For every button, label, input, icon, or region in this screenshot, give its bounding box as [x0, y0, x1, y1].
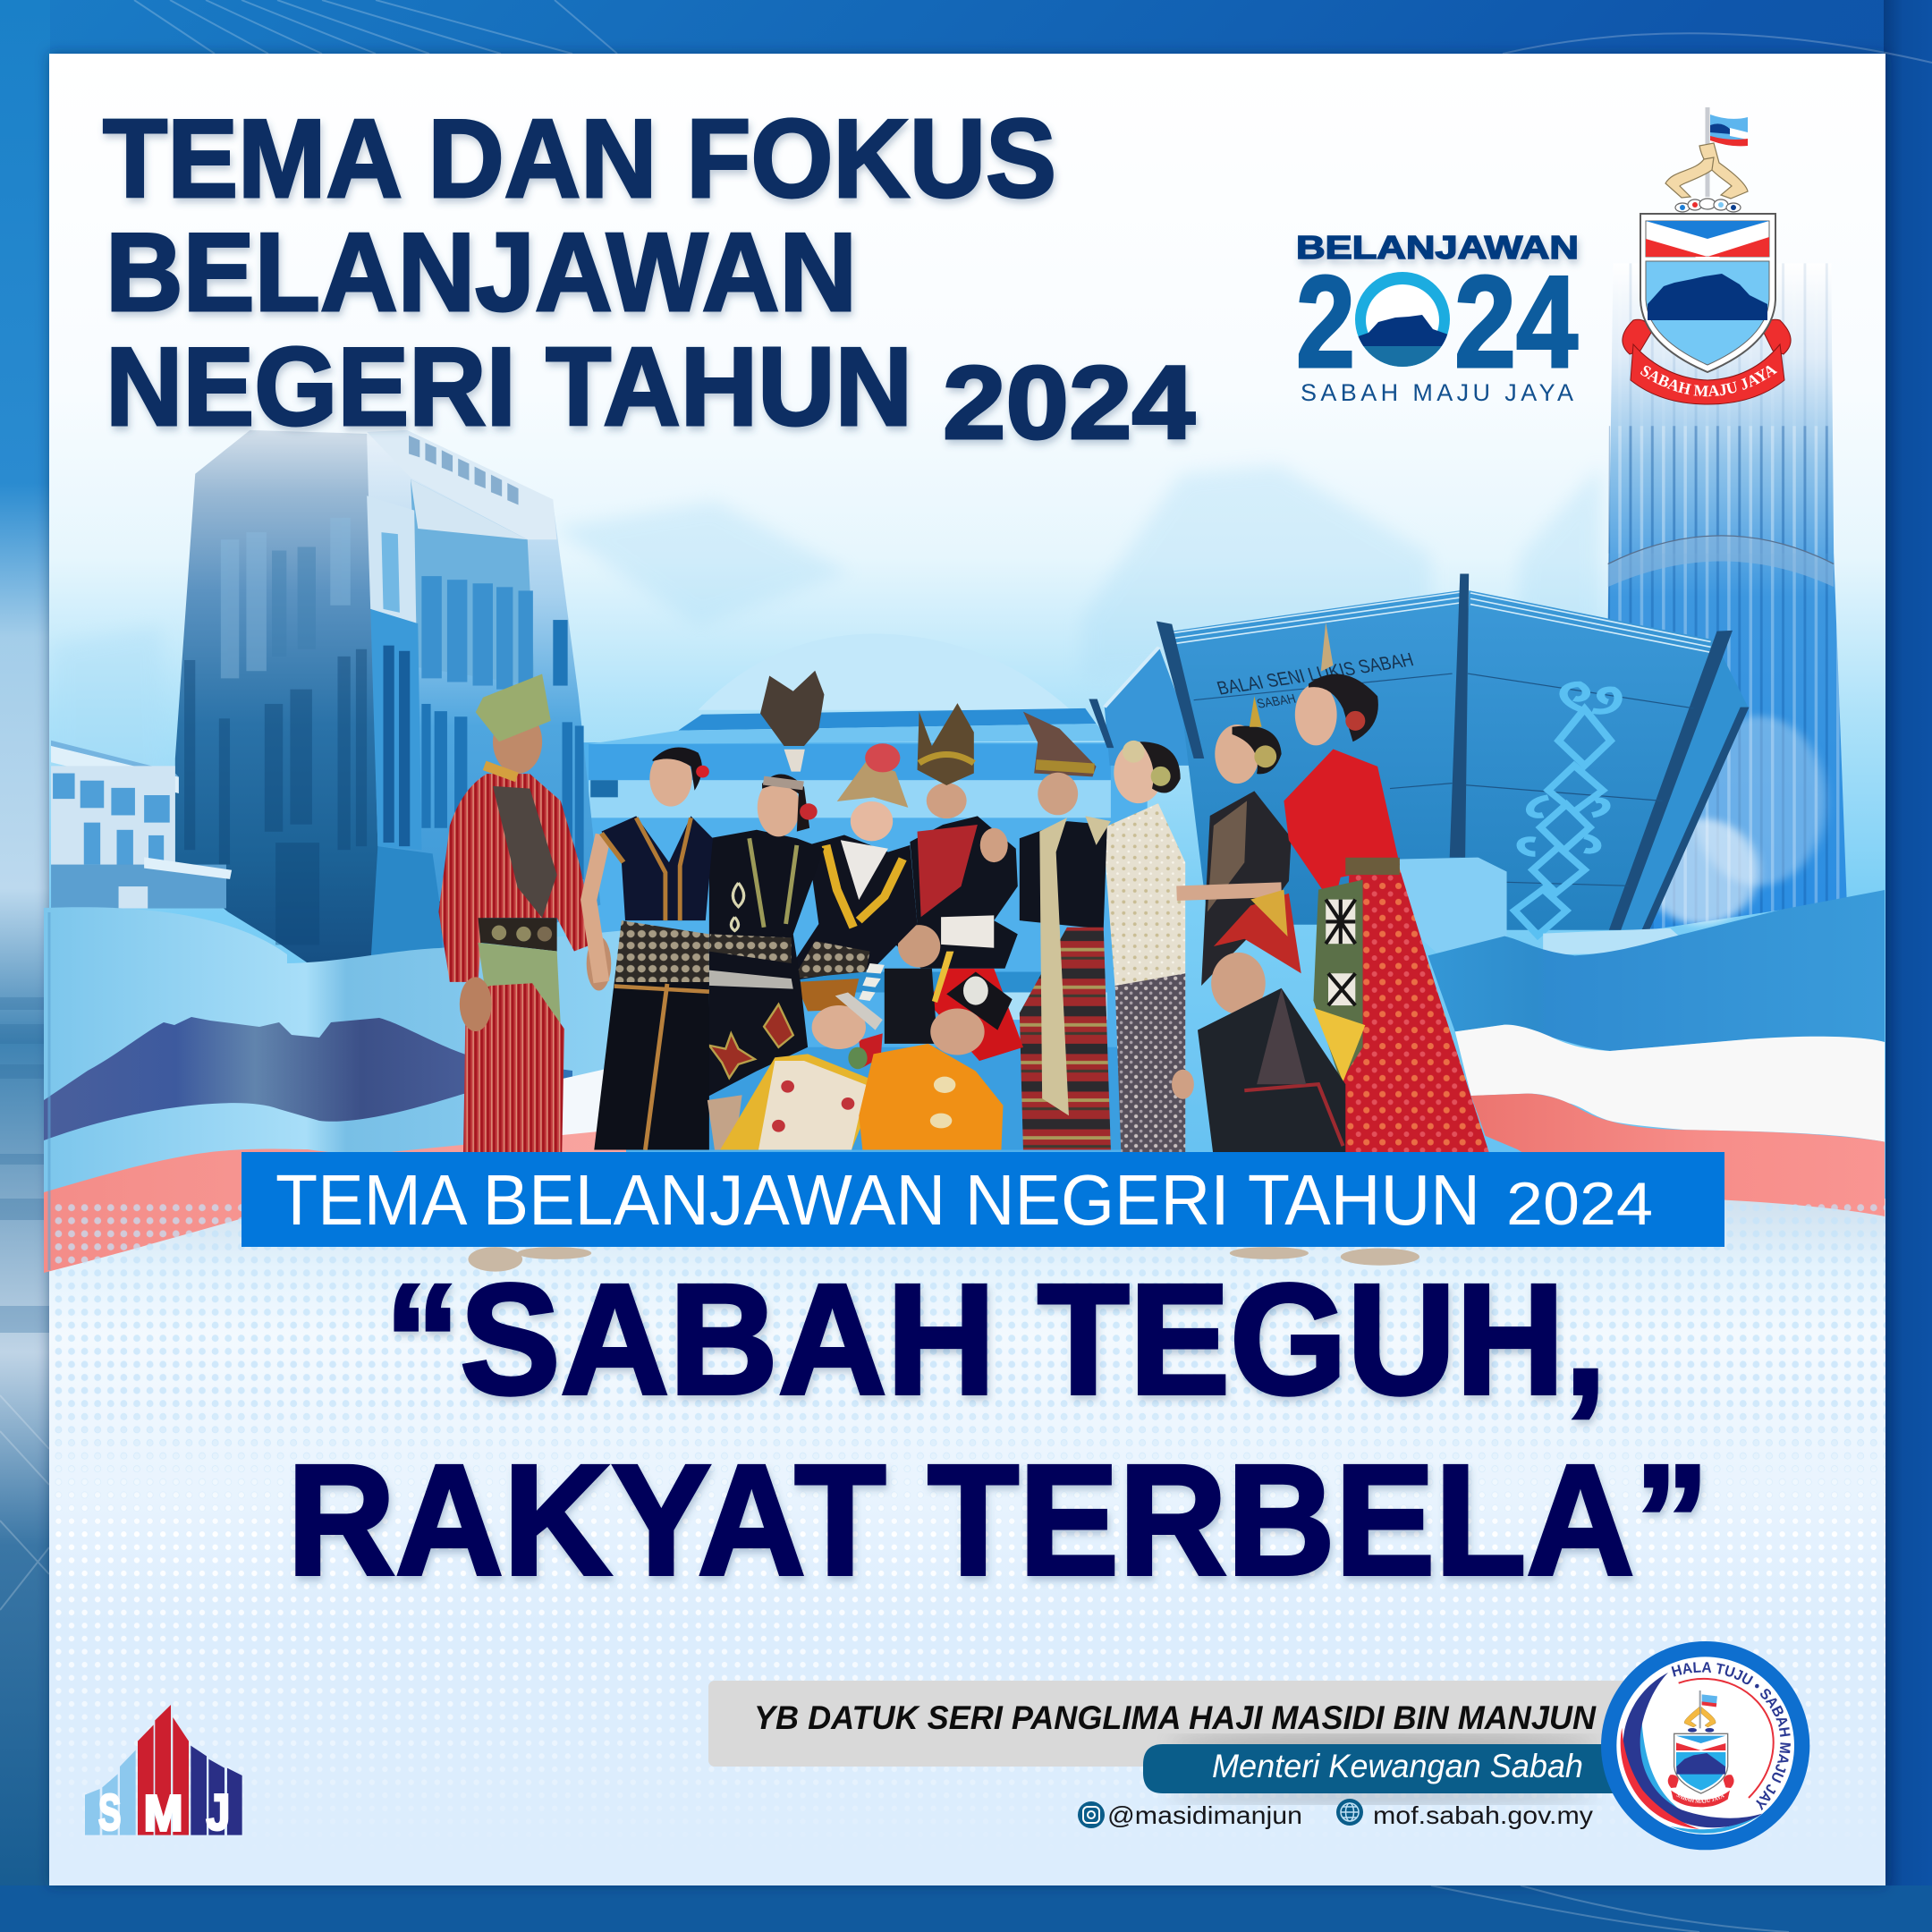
low white annex: [1395, 858, 1507, 953]
icon: instagram: [1078, 1801, 1105, 1828]
seal: miniature crest: SABAH MAJU JAYA: [1676, 1794, 1724, 1803]
logo: SMJ: S: [98, 1784, 121, 1841]
right Sabah flag: [1428, 890, 1885, 1216]
logo: SMJ: M: [144, 1786, 183, 1843]
tower: corner pier: [367, 496, 416, 623]
crest: motto ribbon: SABAH MAJU JAYA: [1640, 365, 1778, 397]
icon: globe: [1336, 1799, 1363, 1826]
theme banner: TEMA BELANJAWAN NEGERI TAHUN: [275, 1160, 1480, 1240]
seal: bottom blue sweep: [1670, 1815, 1760, 1834]
motif: Kadazan knot pattern: [1514, 684, 1618, 936]
minister title pill: Menteri Kewangan Sabah: [1212, 1748, 1583, 1784]
scenic background: Sabah landmarks: [51, 263, 1847, 1153]
halftone dot texture: [49, 1199, 1885, 1860]
figure: crouching man with red headcloth: [1172, 890, 1345, 1158]
logo: SMJ: [85, 1705, 242, 1843]
Balai Seni Lukis building: [1089, 574, 1750, 954]
logo tagline: SABAH MAJU JAYA: [1301, 379, 1573, 406]
structural posts: [1089, 574, 1750, 930]
logo: Hala Tuju Sabah Maju Jaya seal: HALA TUJU • SABAH MAJU JAYA: [1671, 1662, 1791, 1810]
crest: flag held aloft: [1707, 107, 1748, 197]
leg of feather headdress dancer: [708, 1095, 742, 1150]
figure: man with tall headgear: [885, 703, 1023, 1061]
logo: Belanjawan 2024: [1296, 229, 1579, 406]
logo: Sabah state crest: [1622, 107, 1792, 404]
logo digits: 24: [1454, 249, 1578, 394]
gallery signboard text: BALAI SENI LUKIS SABAH: [1214, 648, 1416, 699]
gallery signboard text: [1216, 653, 1413, 708]
theme slogan: [287, 1252, 1709, 1608]
figure: woman in black with silver belt: [589, 747, 713, 1150]
group of Sabah ethnic costumes: [438, 623, 1491, 1272]
social: instagram handle: @masidimanjun: [1107, 1801, 1302, 1829]
seal: ring text: [1674, 1673, 1780, 1805]
logo: SMJ: J: [207, 1784, 230, 1841]
tower: dark face windows: [184, 649, 367, 945]
tower: arched recess: [411, 479, 535, 686]
museum dome and ring building: [578, 633, 1148, 1153]
figure: woman in white kebaya: [1103, 741, 1185, 1158]
social: website: mof.sabah.gov.my: [1373, 1801, 1593, 1829]
crest: lower field with mountain: [1646, 261, 1769, 365]
feet below banner: [468, 1247, 1419, 1272]
left Sabah flag: [44, 907, 626, 1273]
figure: seated man in orange: [859, 972, 1023, 1150]
main title: [103, 97, 1195, 461]
crest: ribbon scrolls: [1623, 319, 1791, 354]
seal: navy crescent: [1623, 1673, 1762, 1827]
theme slogan: RAKYAT TERBELA”: [287, 1433, 1709, 1608]
figure: woman in red costume: [1284, 623, 1491, 1158]
main title: TEMA DAN FOKUS: [103, 97, 1056, 221]
main title: BELANJAWAN: [106, 211, 857, 335]
seal: red crescent: [1621, 1728, 1699, 1829]
main title: NEGERI TAHUN: [106, 326, 912, 449]
figure: woman in dark beaded costume: [1177, 696, 1292, 986]
right glass tower: [1608, 263, 1847, 930]
main title: 2024: [943, 344, 1195, 461]
seal: light blue crescent: [1637, 1710, 1684, 1813]
left tower building: [51, 430, 600, 966]
minister name plate: [708, 1681, 1630, 1767]
crest: arms: [1665, 143, 1748, 199]
tower: lower right windows: [421, 620, 584, 879]
figure: seated woman in yellow: [720, 992, 883, 1150]
crest: shield: [1640, 214, 1775, 372]
minister name plate: YB DATUK SERI PANGLIMA HAJI MASIDI BIN MANJUN: [754, 1699, 1597, 1736]
logo heading: BELANJAWAN: [1296, 229, 1579, 266]
crest: jewels: [1675, 199, 1741, 212]
figure: woman with feather headdress: [708, 671, 824, 1097]
logo digits: 2: [1296, 249, 1355, 394]
figure group: right side performers and man in red stripes: [438, 623, 1491, 1158]
minister title pill: [1143, 1735, 1637, 1803]
theme banner: 2024: [1506, 1170, 1653, 1238]
seal: red arc: [1679, 1679, 1774, 1798]
gallery signboard text: SABAH: [1255, 692, 1298, 712]
figure: woman with conical hat: [790, 743, 918, 1012]
figure group: central performers: [589, 671, 1111, 1150]
crest: motto ribbon: [1631, 344, 1784, 404]
theme slogan: “SABAH TEGUH,: [385, 1252, 1606, 1428]
lower dotted background panel: [49, 1199, 1885, 1885]
low government building: [51, 741, 232, 909]
soft abstract clouds: [64, 462, 1605, 665]
tower: top colonnade: [367, 430, 556, 539]
logo ring with Kinabalu mountain: [1351, 268, 1454, 371]
logo digits: [1296, 249, 1578, 394]
figure: man in red striped costume: [438, 674, 611, 1158]
seal: miniature crest: [1668, 1690, 1734, 1807]
roof railings: [1105, 592, 1711, 708]
figure: man with plaid hat and sash: [1020, 712, 1111, 1150]
crest: chevron panel: [1646, 221, 1769, 261]
